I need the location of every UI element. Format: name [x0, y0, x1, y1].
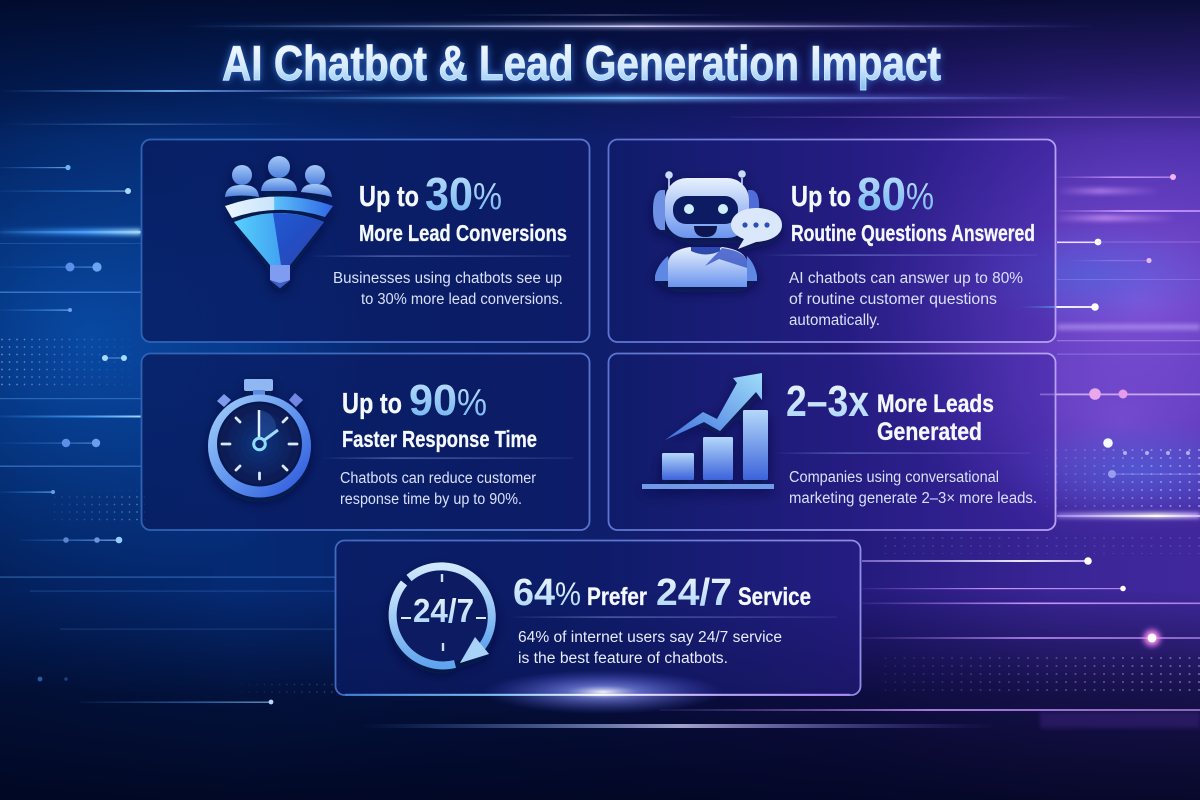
icon: 24/7 clock — [393, 566, 492, 665]
title: AI Chatbot & Lead Generation Impact — [222, 37, 941, 91]
icon: stopwatch — [208, 379, 311, 498]
stat: up to 90%: % — [457, 382, 487, 424]
description: automatically. — [789, 312, 880, 329]
stat: up to 30% — [359, 168, 502, 220]
stat: up to 80%: Up to — [791, 181, 851, 213]
stat: up to 90%: Up to — [342, 388, 402, 420]
panel: more leads — [608, 354, 1056, 530]
description — [789, 469, 1037, 507]
stat: up to 80%: % — [906, 176, 934, 218]
panel: 24/7 service — [336, 540, 860, 714]
description — [333, 270, 563, 308]
subheading: Routine Questions Answered — [791, 220, 1035, 246]
stat: up to 30%: % — [473, 176, 502, 218]
description: AI chatbots can answer up to 80% — [789, 270, 1023, 287]
stat: up to 90%: 90 — [409, 376, 457, 425]
description: Chatbots can reduce customer — [340, 470, 536, 487]
heading: 64% prefer 24/7 service — [513, 572, 811, 614]
description: marketing generate 2–3× more leads. — [789, 490, 1037, 507]
description: of routine customer questions — [789, 291, 997, 308]
description: is the best feature of chatbots. — [518, 650, 728, 667]
stat: 2–3x more leads generated: More Leads — [877, 390, 994, 418]
heading: 64% prefer 24/7 service: 24/7 — [656, 572, 732, 614]
description: Companies using conversational — [789, 469, 999, 486]
subheading: Faster Response Time — [342, 426, 537, 452]
stat: up to 90% — [342, 376, 487, 425]
stat: 2–3x more leads generated — [786, 377, 994, 446]
description — [518, 629, 782, 667]
icon: funnel with people — [225, 156, 333, 288]
icon: robot with speech bubble — [653, 170, 782, 287]
heading: 64% prefer 24/7 service: % — [555, 576, 581, 612]
icon: 24/7 clock: 24/7 — [413, 592, 474, 629]
stat: 2–3x more leads generated: 2–3x — [786, 377, 869, 426]
description: 64% of internet users say 24/7 service — [518, 629, 782, 646]
description: to 30% more lead conversions. — [361, 291, 563, 308]
stat: up to 30%: 30 — [425, 168, 473, 220]
description: Businesses using chatbots see up — [333, 270, 562, 287]
subheading: More Lead Conversions — [359, 220, 567, 246]
description: response time by up to 90%. — [340, 491, 522, 508]
heading: 64% prefer 24/7 service: 64 — [513, 572, 555, 614]
panel: response time — [142, 354, 590, 530]
panel: routine questions — [608, 140, 1056, 342]
panel: lead conversions — [142, 140, 590, 342]
heading: 64% prefer 24/7 service: Service — [738, 583, 811, 611]
description — [340, 470, 536, 508]
stat: up to 80% — [791, 168, 934, 220]
stat: up to 80%: 80 — [857, 168, 906, 220]
stat: up to 30%: Up to — [359, 181, 419, 213]
icon: rising bar chart with arrow — [642, 373, 774, 489]
heading: 64% prefer 24/7 service: Prefer — [587, 583, 647, 611]
stat: 2–3x more leads generated: Generated — [877, 418, 982, 446]
description — [789, 270, 1023, 329]
